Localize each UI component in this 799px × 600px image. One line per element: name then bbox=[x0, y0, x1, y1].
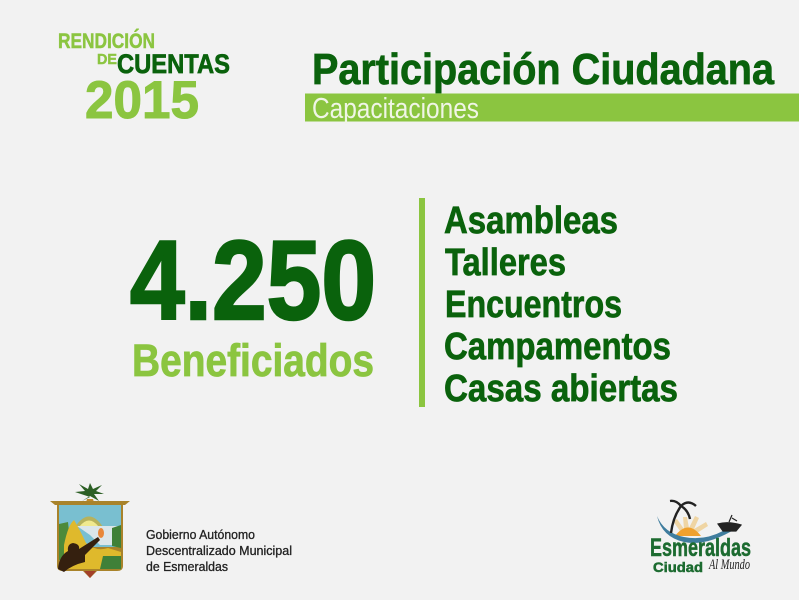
beneficiaries label: Beneficiados bbox=[132, 335, 374, 386]
activity list: Casas abiertas bbox=[444, 368, 678, 410]
icon: municipal coat of arms bbox=[50, 483, 130, 578]
palm tree crest bbox=[75, 483, 104, 506]
figure silhouette with torch bbox=[58, 537, 100, 572]
activity list: Campamentos bbox=[444, 326, 671, 368]
yellow hillside bbox=[64, 520, 121, 569]
logo: Rendición de Cuentas 2015: 2015 bbox=[85, 71, 199, 130]
shield top bar bbox=[50, 501, 130, 505]
green left vegetation bbox=[59, 522, 72, 560]
wave bbox=[657, 516, 737, 543]
activity list: Talleres bbox=[445, 242, 566, 284]
logo: Esmeraldas Ciudad al Mundo bbox=[650, 501, 751, 575]
municipal name: de Esmeraldas bbox=[146, 560, 228, 574]
logo: Rendición de Cuentas 2015: RENDICIÓN bbox=[58, 29, 155, 53]
torch flame bbox=[98, 528, 104, 538]
wordmark: Esmeraldas bbox=[650, 534, 751, 562]
logo: Rendición de Cuentas 2015 bbox=[58, 29, 230, 130]
activity list: Encuentros bbox=[445, 284, 622, 326]
ciudad word: Ciudad bbox=[653, 559, 703, 575]
big number: 4.250 bbox=[130, 218, 376, 343]
green right vegetation bbox=[100, 525, 121, 569]
sun bbox=[675, 528, 701, 536]
municipal name: Descentralizado Municipal bbox=[146, 544, 292, 558]
logo: Rendición de Cuentas 2015: CUENTAS bbox=[117, 49, 230, 79]
sun rays bbox=[673, 516, 708, 533]
al mundo signature: Al Mundo bbox=[708, 557, 750, 573]
clouds and sea bbox=[77, 526, 120, 545]
bottom ornament bbox=[84, 571, 96, 578]
logo: Rendición de Cuentas 2015: DE bbox=[97, 51, 117, 68]
dome sunrise bbox=[75, 516, 103, 527]
sky bbox=[59, 505, 121, 547]
municipal name: Gobierno Autónomo bbox=[146, 528, 255, 542]
shield bbox=[57, 504, 123, 578]
boat bbox=[718, 515, 741, 531]
activity list: Asambleas bbox=[444, 200, 618, 242]
palm tree bbox=[670, 501, 696, 533]
vertical divider bbox=[419, 198, 425, 407]
subtitle banner bbox=[305, 93, 799, 125]
subtitle banner: Capacitaciones bbox=[312, 93, 479, 125]
municipal name bbox=[146, 528, 292, 574]
activity list bbox=[444, 200, 678, 410]
